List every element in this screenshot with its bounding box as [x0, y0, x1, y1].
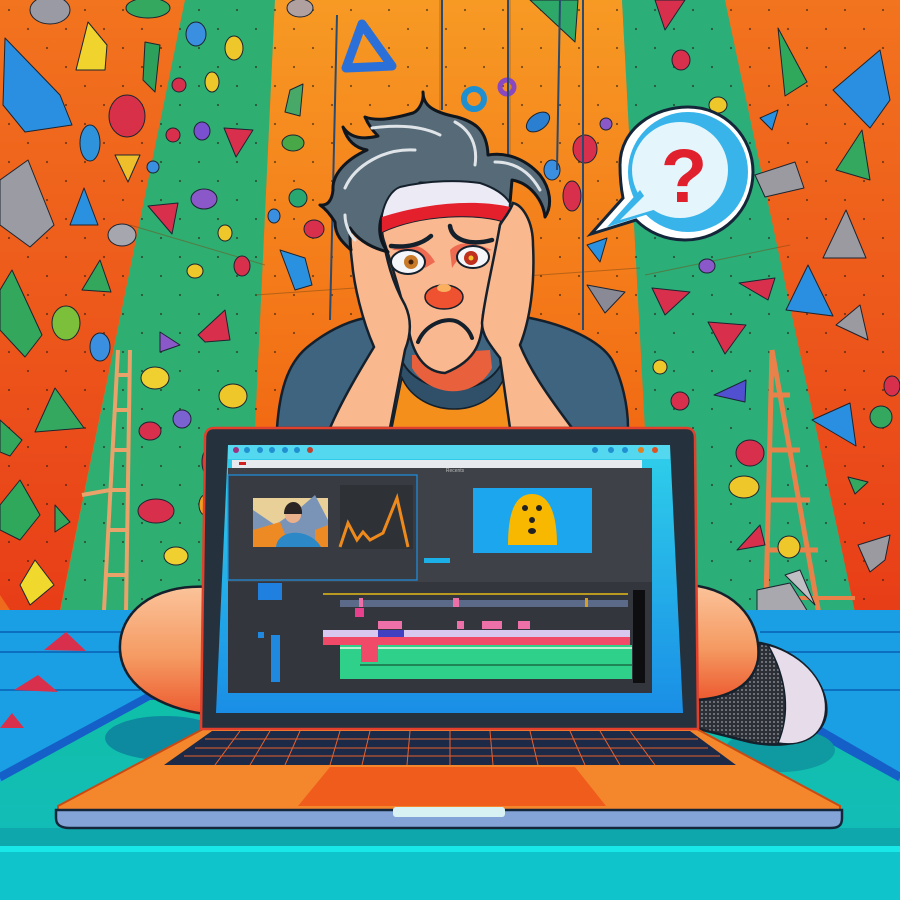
video thumbnail	[253, 495, 328, 547]
laptop	[56, 428, 842, 828]
person	[277, 92, 628, 428]
ladder: right	[766, 350, 855, 620]
eyebrows	[391, 226, 492, 247]
mouth	[418, 320, 472, 342]
preview panel with warning figure	[473, 488, 592, 553]
hair highlights	[345, 122, 540, 240]
laptop base	[58, 728, 840, 812]
shirt	[277, 318, 628, 428]
eyes	[391, 246, 489, 274]
face	[382, 200, 510, 373]
left arm and hand	[330, 228, 410, 428]
laptop lid	[201, 428, 698, 729]
waveform chart	[340, 485, 413, 549]
top toolbar icons	[228, 445, 670, 459]
climbing holds	[0, 0, 900, 615]
neck	[412, 350, 492, 391]
orange shirt front	[392, 378, 512, 428]
climbing wall background	[0, 0, 900, 640]
hair	[320, 92, 550, 252]
shoe	[695, 643, 826, 745]
trackpad	[298, 767, 606, 806]
ladder: left	[82, 350, 130, 612]
laptop screen	[216, 445, 683, 713]
floor mats	[0, 610, 900, 900]
right hand and arm	[482, 203, 572, 428]
nose	[425, 284, 463, 309]
editing software window	[228, 460, 652, 693]
timeline	[228, 582, 652, 693]
shirt collar	[392, 355, 510, 428]
speech bubble with question mark	[591, 107, 753, 240]
ropes	[330, 0, 583, 330]
editing software window: Recents	[446, 468, 465, 474]
legs	[120, 585, 826, 745]
keyboard	[164, 731, 736, 765]
headband	[382, 181, 510, 232]
blush around eyes	[392, 243, 492, 268]
question mark: ?	[661, 134, 707, 219]
